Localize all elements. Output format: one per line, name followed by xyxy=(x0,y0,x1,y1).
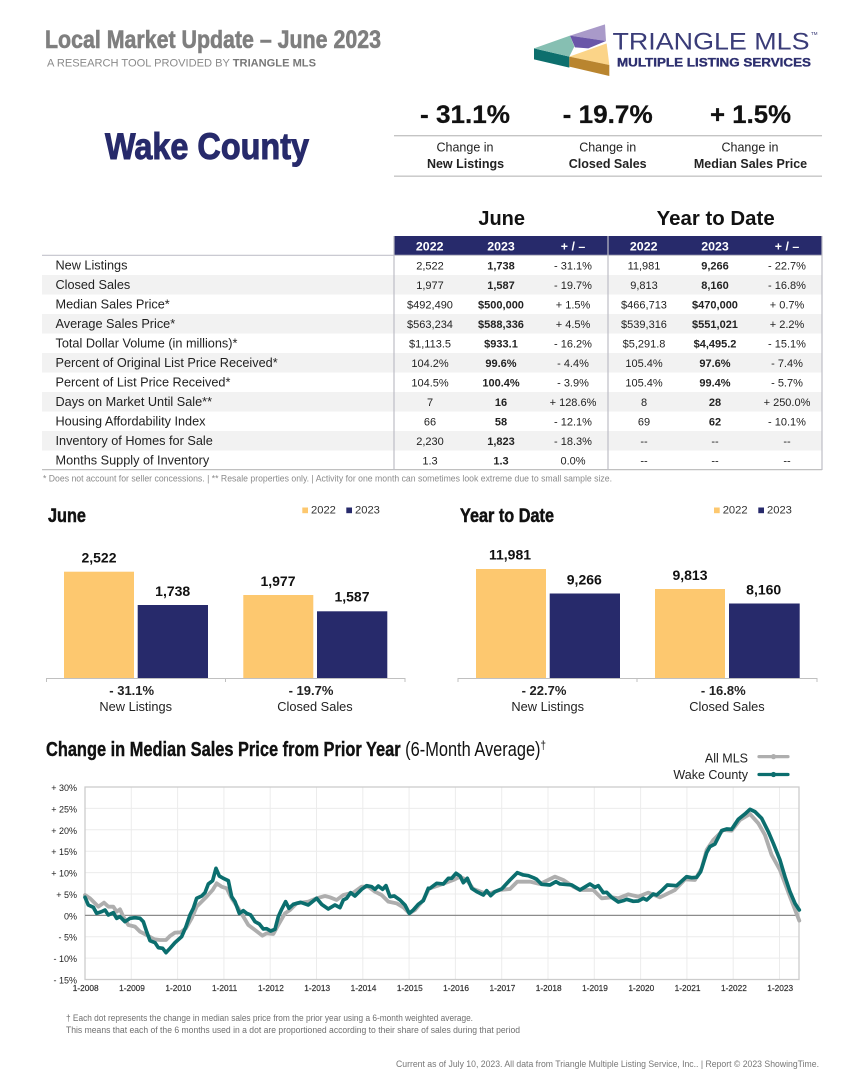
category label: Closed Sales: - 19.7% xyxy=(289,683,334,698)
bars: Closed Sales: 9,813 xyxy=(672,567,708,583)
row: Closed Sales: - 19.7% xyxy=(554,280,592,292)
row: Percent of List Price Received: - 5.7% xyxy=(771,378,803,390)
table header row: 2023 xyxy=(487,240,515,254)
legend: line chart xyxy=(673,752,788,782)
category label: Closed Sales: Closed Sales xyxy=(277,699,353,714)
row: Total Dollar Volume: $1,113.5 xyxy=(409,338,451,350)
row: Average Sales Price xyxy=(56,317,804,331)
row: Average Sales Price: $563,234 xyxy=(407,319,453,331)
stat: closed sales xyxy=(563,101,653,171)
x axis labels: 1-2022 xyxy=(721,983,747,993)
legend: June chart: 2023 xyxy=(355,504,380,516)
row: Median Sales Price: $466,713 xyxy=(621,300,667,312)
heading: line chart title: Change in Median Sales Price from Prior Year (6-Month Average) xyxy=(46,739,571,761)
stat: closed sales: - 19.7% xyxy=(563,101,653,129)
table: market metrics xyxy=(42,208,822,470)
row: Housing Affordability Index xyxy=(56,414,806,428)
row: Percent of List Price Received xyxy=(56,376,803,390)
stat: new listings: - 31.1% xyxy=(420,101,510,129)
row: Closed Sales: 1,977 xyxy=(416,280,444,292)
legend: June chart: 2022 xyxy=(311,504,336,516)
row: Median Sales Price: + 0.7% xyxy=(770,300,804,312)
y axis labels: + 25% xyxy=(51,804,77,814)
row: Housing Affordability Index: Housing Affordability Index xyxy=(56,414,206,428)
row: Percent of List Price Received: 99.4% xyxy=(699,378,731,390)
row: Days on Market Until Sale: + 128.6% xyxy=(550,397,597,409)
chart heading: June: June xyxy=(48,506,86,527)
y axis labels: + 20% xyxy=(51,826,77,836)
table header row: + / – xyxy=(561,240,585,254)
row: Housing Affordability Index: 69 xyxy=(638,416,650,428)
category label: Closed Sales xyxy=(277,683,353,714)
x axis labels: 1-2013 xyxy=(304,983,330,993)
y axis labels: + 10% xyxy=(51,869,77,879)
row: Days on Market Until Sale: 7 xyxy=(427,397,433,409)
row: Median Sales Price: $492,490 xyxy=(407,300,453,312)
row: Months Supply of Inventory: -- xyxy=(640,456,648,468)
row: Inventory of Homes for Sale: Inventory of Homes for Sale xyxy=(56,434,213,448)
bars: New Listings: 2,522 xyxy=(81,550,117,566)
category label: Closed Sales: Closed Sales xyxy=(689,699,765,714)
row: Total Dollar Volume: $4,495.2 xyxy=(694,338,736,350)
line chart: change in median sales price xyxy=(51,783,799,993)
row: Total Dollar Volume: $5,291.8 xyxy=(623,338,665,350)
series: All MLS xyxy=(85,814,799,940)
category label: New Listings: New Listings xyxy=(99,699,172,714)
row: Closed Sales: - 16.8% xyxy=(768,280,806,292)
category label: Closed Sales: - 16.8% xyxy=(701,683,746,698)
stat: new listings xyxy=(420,101,510,171)
row: Percent of List Price Received: 104.5% xyxy=(411,378,449,390)
row: Total Dollar Volume: - 15.1% xyxy=(768,338,806,350)
row: New Listings xyxy=(56,258,806,272)
x axis labels: 1-2009 xyxy=(119,983,145,993)
bars: New Listings xyxy=(476,546,620,678)
stat: closed sales: Closed Sales xyxy=(569,157,647,171)
row: Average Sales Price: $539,316 xyxy=(621,319,667,331)
category label: New Listings: New Listings xyxy=(511,699,584,714)
bars: New Listings: 1,738 xyxy=(155,583,190,599)
x axis labels xyxy=(73,983,793,993)
x axis labels: 1-2023 xyxy=(767,983,793,993)
column heading: Year to Date: Year to Date xyxy=(657,208,775,230)
bar chart: June xyxy=(46,504,405,714)
y axis labels: + 5% xyxy=(56,890,77,900)
stat: median sales price: + 1.5% xyxy=(710,101,791,129)
y axis labels: - 15% xyxy=(53,976,77,986)
y axis labels: + 15% xyxy=(51,847,77,857)
legend: June chart xyxy=(302,504,380,516)
row: Housing Affordability Index: - 12.1% xyxy=(554,416,592,428)
bars: New Listings: 11,981 xyxy=(489,546,531,562)
x axis labels: 1-2018 xyxy=(536,983,562,993)
row: Months Supply of Inventory: 1.3 xyxy=(493,456,509,468)
row: Inventory of Homes for Sale: -- xyxy=(711,436,719,448)
row: Average Sales Price: + 4.5% xyxy=(556,319,590,331)
row: New Listings: 2,522 xyxy=(416,260,444,272)
row: Inventory of Homes for Sale: 1,823 xyxy=(487,436,515,448)
row: Total Dollar Volume: - 16.2% xyxy=(554,338,592,350)
row: Inventory of Homes for Sale xyxy=(56,434,791,448)
row: Days on Market Until Sale: 28 xyxy=(709,397,721,409)
stat: median sales price: Change in xyxy=(722,141,779,155)
y axis labels xyxy=(51,783,77,986)
row: Median Sales Price: Median Sales Price* xyxy=(56,298,170,312)
category label: New Listings: - 31.1% xyxy=(109,683,155,698)
chart footnote: † Each dot represents the change in median sales price from the prior year using a 6-month weighted average. xyxy=(66,1013,473,1023)
row: Percent of List Price Received: - 3.9% xyxy=(557,378,589,390)
table footnote: * Does not account for seller concessions. | ** Resale properties only. | Activity for one month can sometimes look extreme due to small sample size. xyxy=(43,473,612,483)
category label: New Listings xyxy=(99,683,172,714)
stat: new listings: Change in xyxy=(436,141,494,155)
category label: New Listings xyxy=(511,683,584,714)
row: Percent of Original List Price Received: Percent of Original List Price Received* xyxy=(56,356,278,370)
row: Percent of Original List Price Received: - 7.4% xyxy=(771,358,803,370)
table header row: 2022 xyxy=(630,240,658,254)
category label: Closed Sales xyxy=(689,683,765,714)
legend: Year to Date chart xyxy=(714,504,792,516)
x axis labels: 1-2017 xyxy=(489,983,516,993)
row: Percent of Original List Price Received: 97.6% xyxy=(699,358,731,370)
row: Inventory of Homes for Sale: - 18.3% xyxy=(554,436,592,448)
row: New Listings: 9,266 xyxy=(701,260,729,272)
row: New Listings: New Listings xyxy=(56,258,127,272)
x axis labels: 1-2016 xyxy=(443,983,469,993)
row: Months Supply of Inventory: 0.0% xyxy=(560,456,586,468)
heading: Wake County: Wake County xyxy=(105,126,309,167)
row: Percent of List Price Received: 105.4% xyxy=(625,378,663,390)
bars: Closed Sales: 1,977 xyxy=(260,573,296,589)
bars: Closed Sales xyxy=(243,573,387,678)
x axis labels: 1-2015 xyxy=(397,983,423,993)
row: Median Sales Price: $500,000 xyxy=(478,300,524,312)
legend: line chart: Wake County xyxy=(673,768,749,782)
x axis labels: 1-2014 xyxy=(351,983,377,993)
logo: Triangle MLS: TRIANGLE MLS xyxy=(612,29,810,55)
chart footnote xyxy=(66,1013,520,1035)
row: Housing Affordability Index: 58 xyxy=(495,416,507,428)
x axis labels: 1-2008 xyxy=(73,983,99,993)
row: Closed Sales: 9,813 xyxy=(630,280,658,292)
row: Housing Affordability Index: - 10.1% xyxy=(768,416,806,428)
row: Closed Sales: 8,160 xyxy=(701,280,729,292)
bars: New Listings: 9,266 xyxy=(567,571,602,587)
row: Days on Market Until Sale: 8 xyxy=(641,397,647,409)
x axis labels: 1-2020 xyxy=(628,983,655,993)
bars: Closed Sales: 1,587 xyxy=(334,589,370,605)
x axis labels: 1-2012 xyxy=(258,983,284,993)
legend: Year to Date chart: 2022 xyxy=(723,504,748,516)
row: Total Dollar Volume: Total Dollar Volume (in millions)* xyxy=(56,336,237,350)
row: New Listings: 1,738 xyxy=(487,260,515,272)
footer: source line: Current as of July 10, 2023. All data from Triangle Multiple Listing Service, Inc.. | Report © 2023 ShowingTime. xyxy=(396,1059,819,1070)
category label: New Listings: - 22.7% xyxy=(522,683,567,698)
table header row: + / – xyxy=(775,240,799,254)
row: Total Dollar Volume: $933.1 xyxy=(484,338,518,350)
row: Percent of Original List Price Received xyxy=(56,356,803,370)
stat: median sales price xyxy=(694,101,807,171)
row: Days on Market Until Sale: + 250.0% xyxy=(764,397,811,409)
stat: median sales price: Median Sales Price xyxy=(694,157,807,171)
header: report title: Local Market Update – June 2023 xyxy=(45,26,381,54)
header: report title: A RESEARCH TOOL PROVIDED BY TRIANGLE MLS xyxy=(47,58,316,70)
y axis labels: + 30% xyxy=(51,783,77,793)
row: Percent of Original List Price Received: 104.2% xyxy=(411,358,449,370)
row: Closed Sales: 1,587 xyxy=(487,280,515,292)
heading: line chart title: † xyxy=(541,738,546,752)
bars: Closed Sales xyxy=(655,567,800,678)
row: Months Supply of Inventory: -- xyxy=(783,456,791,468)
panel: key change statistics xyxy=(394,101,822,176)
table header row: 2022 xyxy=(416,240,444,254)
row: Closed Sales xyxy=(56,278,806,292)
row: Months Supply of Inventory: 1.3 xyxy=(422,456,438,468)
legend: line chart: All MLS xyxy=(705,752,748,766)
row: Months Supply of Inventory xyxy=(56,454,791,468)
row: Total Dollar Volume xyxy=(56,336,806,350)
stat: new listings: New Listings xyxy=(427,157,504,171)
x axis labels: 1-2021 xyxy=(675,983,701,993)
row: Average Sales Price: $551,021 xyxy=(692,319,738,331)
logo: Triangle MLS xyxy=(534,24,818,76)
row: Average Sales Price: $588,336 xyxy=(478,319,524,331)
row: Months Supply of Inventory: -- xyxy=(711,456,719,468)
row: Median Sales Price: + 1.5% xyxy=(556,300,590,312)
table header row: 2023 xyxy=(701,240,729,254)
row: Median Sales Price: $470,000 xyxy=(692,300,738,312)
row: Percent of Original List Price Received: 99.6% xyxy=(485,358,517,370)
row: Days on Market Until Sale: 16 xyxy=(495,397,507,409)
stat: closed sales: Change in xyxy=(579,141,636,155)
row: New Listings: - 31.1% xyxy=(554,260,592,272)
bars: Closed Sales: 8,160 xyxy=(746,581,781,597)
row: Months Supply of Inventory: Months Supply of Inventory xyxy=(56,454,210,468)
legend: Year to Date chart: 2023 xyxy=(767,504,792,516)
row: New Listings: 11,981 xyxy=(628,260,660,272)
chart heading: Year to Date: Year to Date xyxy=(460,506,554,527)
x axis labels: 1-2011 xyxy=(212,983,238,993)
row: Percent of List Price Received: Percent of List Price Received* xyxy=(56,376,230,390)
row: Closed Sales: Closed Sales xyxy=(56,278,130,292)
bar chart: Year to Date xyxy=(458,504,817,714)
chart footnote: This means that each of the 6 months used in a dot are proportioned according to their share of sales during that period xyxy=(66,1025,520,1035)
logo: Triangle MLS: MULTIPLE LISTING SERVICES xyxy=(617,56,811,70)
row: Median Sales Price xyxy=(56,298,804,312)
row: Inventory of Homes for Sale: -- xyxy=(640,436,648,448)
column heading: June: June xyxy=(478,208,525,230)
row: Average Sales Price: + 2.2% xyxy=(770,319,804,331)
y axis labels: 0% xyxy=(64,911,77,921)
row: Housing Affordability Index: 66 xyxy=(424,416,436,428)
x axis labels: 1-2010 xyxy=(165,983,192,993)
y axis labels: - 10% xyxy=(53,954,77,964)
bars: New Listings xyxy=(64,550,208,678)
row: Inventory of Homes for Sale: -- xyxy=(783,436,791,448)
row: New Listings: - 22.7% xyxy=(768,260,806,272)
row: Percent of List Price Received: 100.4% xyxy=(482,378,520,390)
table header row xyxy=(394,236,822,255)
row: Days on Market Until Sale: Days on Market Until Sale** xyxy=(56,395,212,409)
row: Housing Affordability Index: 62 xyxy=(709,416,721,428)
row: Percent of Original List Price Received: - 4.4% xyxy=(557,358,589,370)
row: Average Sales Price: Average Sales Price* xyxy=(56,317,175,331)
row: Inventory of Homes for Sale: 2,230 xyxy=(416,436,444,448)
header: report title xyxy=(45,26,381,70)
x axis labels: 1-2019 xyxy=(582,983,608,993)
logo: Triangle MLS: TM xyxy=(811,31,818,36)
series: Wake County xyxy=(85,809,799,953)
y axis labels: - 5% xyxy=(58,933,77,943)
row: Percent of Original List Price Received: 105.4% xyxy=(625,358,663,370)
row: Days on Market Until Sale xyxy=(56,395,811,409)
